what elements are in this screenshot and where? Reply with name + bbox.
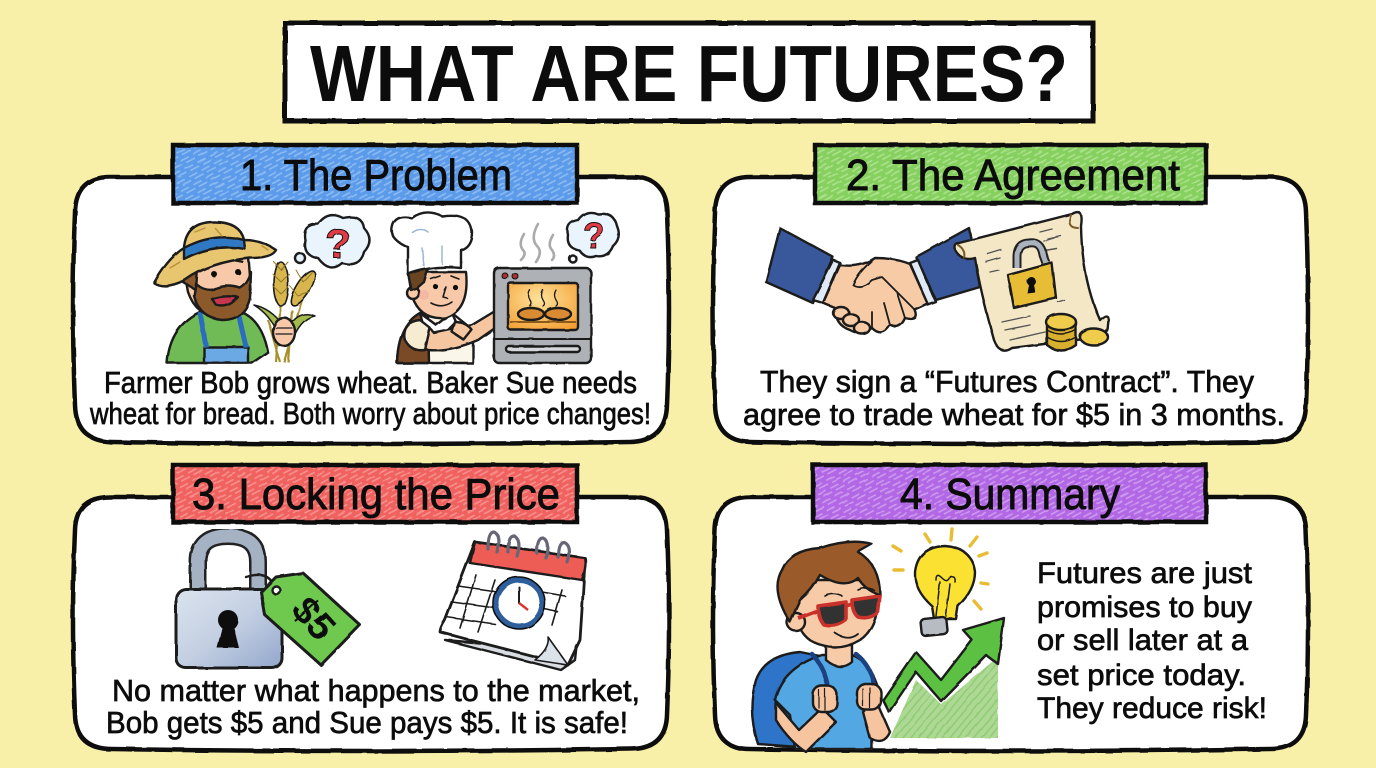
heading: 3. Locking the Price: 3. Locking the Price [192, 470, 560, 519]
text: agreement description: They sign a “Futures Contract”. They [760, 364, 1254, 399]
heading: 1. The Problem [173, 145, 577, 203]
icon: farmer question bubble: ? [325, 220, 351, 267]
icon: farmer question bubble [295, 215, 370, 267]
panel: 3. Locking the Price [73, 465, 669, 751]
text: locking description: No matter what happens to the market, [112, 673, 640, 708]
heading: 1. The Problem: 1. The Problem [240, 151, 512, 200]
icon: baker at oven [392, 212, 518, 363]
icon: steam [521, 224, 554, 262]
icon: padlock [176, 536, 282, 668]
text: summary: set price today. [1037, 659, 1246, 692]
heading: 4. Summary: 4. Summary [900, 470, 1120, 519]
text: problem description: Farmer Bob grows wheat. Baker Sue needs [104, 365, 637, 400]
icon: calendar with clock [440, 532, 586, 670]
panel: 1. The Problem [73, 145, 669, 444]
text: problem description [89, 365, 651, 431]
heading: 2. The Agreement: 2. The Agreement [846, 151, 1180, 200]
title: WHAT ARE FUTURES? [310, 29, 1068, 118]
icon: contract scroll with lock [954, 212, 1108, 351]
text: summary [1037, 557, 1267, 725]
icon: baker question bubble [567, 212, 619, 262]
text: locking description [106, 673, 640, 740]
heading: 4. Summary [813, 465, 1206, 522]
icon: gold coins [1046, 314, 1108, 350]
icon: handshake [766, 228, 980, 334]
icon: baker question bubble: ? [583, 215, 605, 256]
text: summary: or sell later at a [1037, 624, 1248, 657]
text: locking description: Bob gets $5 and Sue pays $5. It is safe! [106, 705, 628, 740]
chart: rising arrow [883, 618, 1004, 738]
text: problem description: wheat for bread. Both worry about price changes! [89, 396, 651, 431]
icon: light bulb [915, 546, 975, 636]
text: summary: They reduce risk! [1037, 692, 1267, 725]
panel: 2. The Agreement [713, 145, 1308, 444]
icon: farmer with wheat [154, 222, 320, 363]
text: summary: promises to buy [1037, 591, 1252, 624]
text: agreement description: agree to trade wheat for $5 in 3 months. [743, 397, 1285, 432]
icon: $5 price tag: $5 [283, 589, 343, 649]
text: agreement description [743, 364, 1285, 432]
text: summary: Futures are just [1037, 557, 1253, 590]
icon: oven [494, 268, 591, 363]
panel: 4. Summary [713, 465, 1308, 752]
icon: boy with sunglasses [752, 542, 890, 752]
icon: bulb rays [893, 529, 988, 609]
icon: $5 price tag [246, 573, 360, 665]
